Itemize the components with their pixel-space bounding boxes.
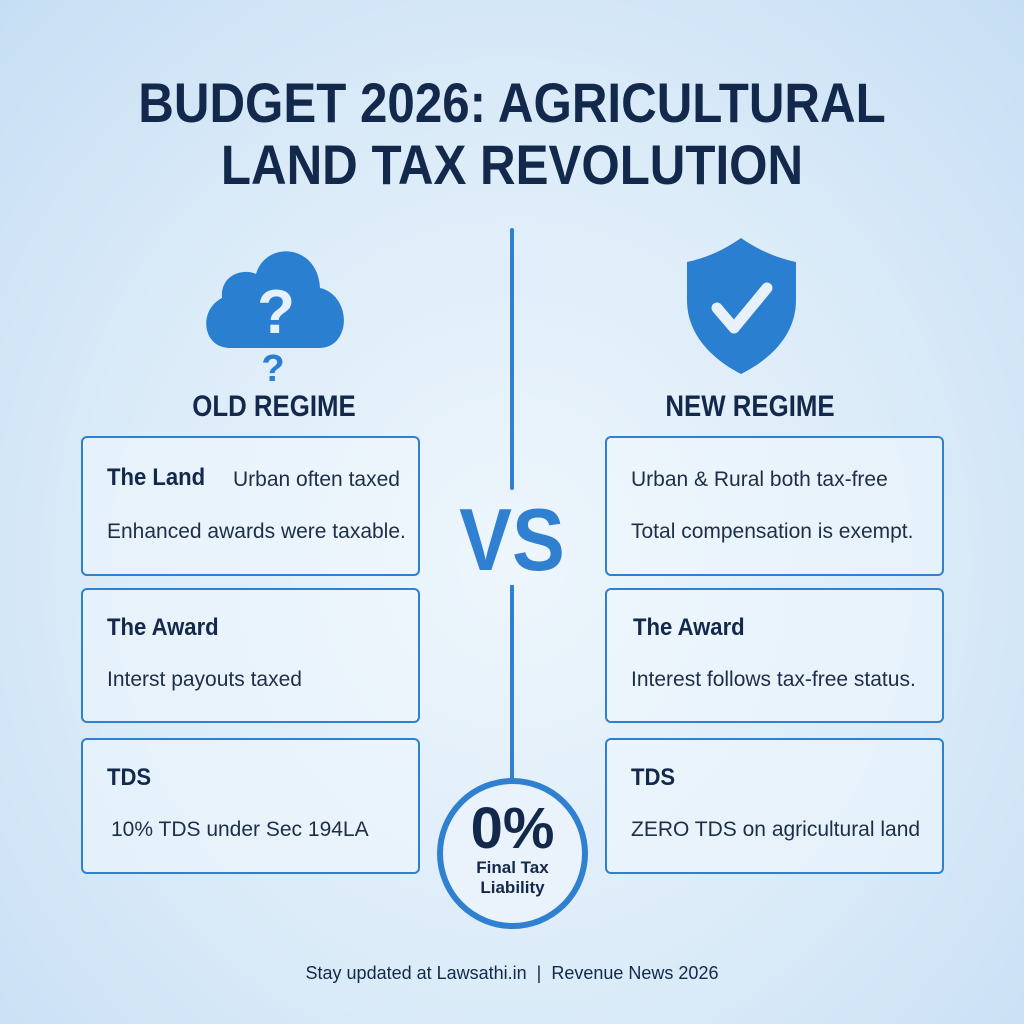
footer: Stay updated at Lawsathi.in | Revenue News 2026 [306,963,718,983]
icon: shield with check [687,238,796,374]
panel: new TDS: ZERO TDS on agricultural land [631,818,920,841]
VS label: VS [459,490,565,589]
panel: new award [605,588,944,723]
panel: new TDS [605,738,944,874]
heading: new regime: NEW REGIME [665,390,835,423]
icon: cloud with question marks [206,251,344,390]
panel: old award: Interst payouts taxed [107,668,302,691]
title: LAND TAX REVOLUTION [221,133,803,196]
heading: old regime: OLD REGIME [192,390,356,423]
panel: old land [81,436,420,576]
panel: old land: Enhanced awards were taxable. [107,520,406,543]
title [138,71,886,196]
panel: old award: The Award [107,614,219,641]
callout: 0% final tax liability: 0% [471,796,554,861]
panel: new award: Interest follows tax-free status. [631,668,916,691]
callout: 0% final tax liability: Final Tax [476,858,549,877]
panel: old TDS: TDS [107,764,151,791]
panel: new land: Total compensation is exempt. [631,520,913,543]
panel: new award: The Award [633,614,745,641]
panel: old land: The Land [107,464,205,491]
panel: new land [605,436,944,576]
title: BUDGET 2026: AGRICULTURAL [138,71,886,134]
callout: 0% final tax liability: Liability [480,878,545,897]
panel: old award [81,588,420,723]
panel: old TDS: 10% TDS under Sec 194LA [111,818,369,841]
panel: new land: Urban & Rural both tax-free [631,468,888,491]
panel: old TDS [81,738,420,874]
panel: new TDS: TDS [631,764,675,791]
icon: cloud with question marks: ? [257,278,295,347]
icon: cloud with question marks: ? [261,348,285,390]
center divider line [510,228,514,490]
panel: old land: Urban often taxed [233,468,400,491]
callout: 0% final tax liability [437,778,588,929]
